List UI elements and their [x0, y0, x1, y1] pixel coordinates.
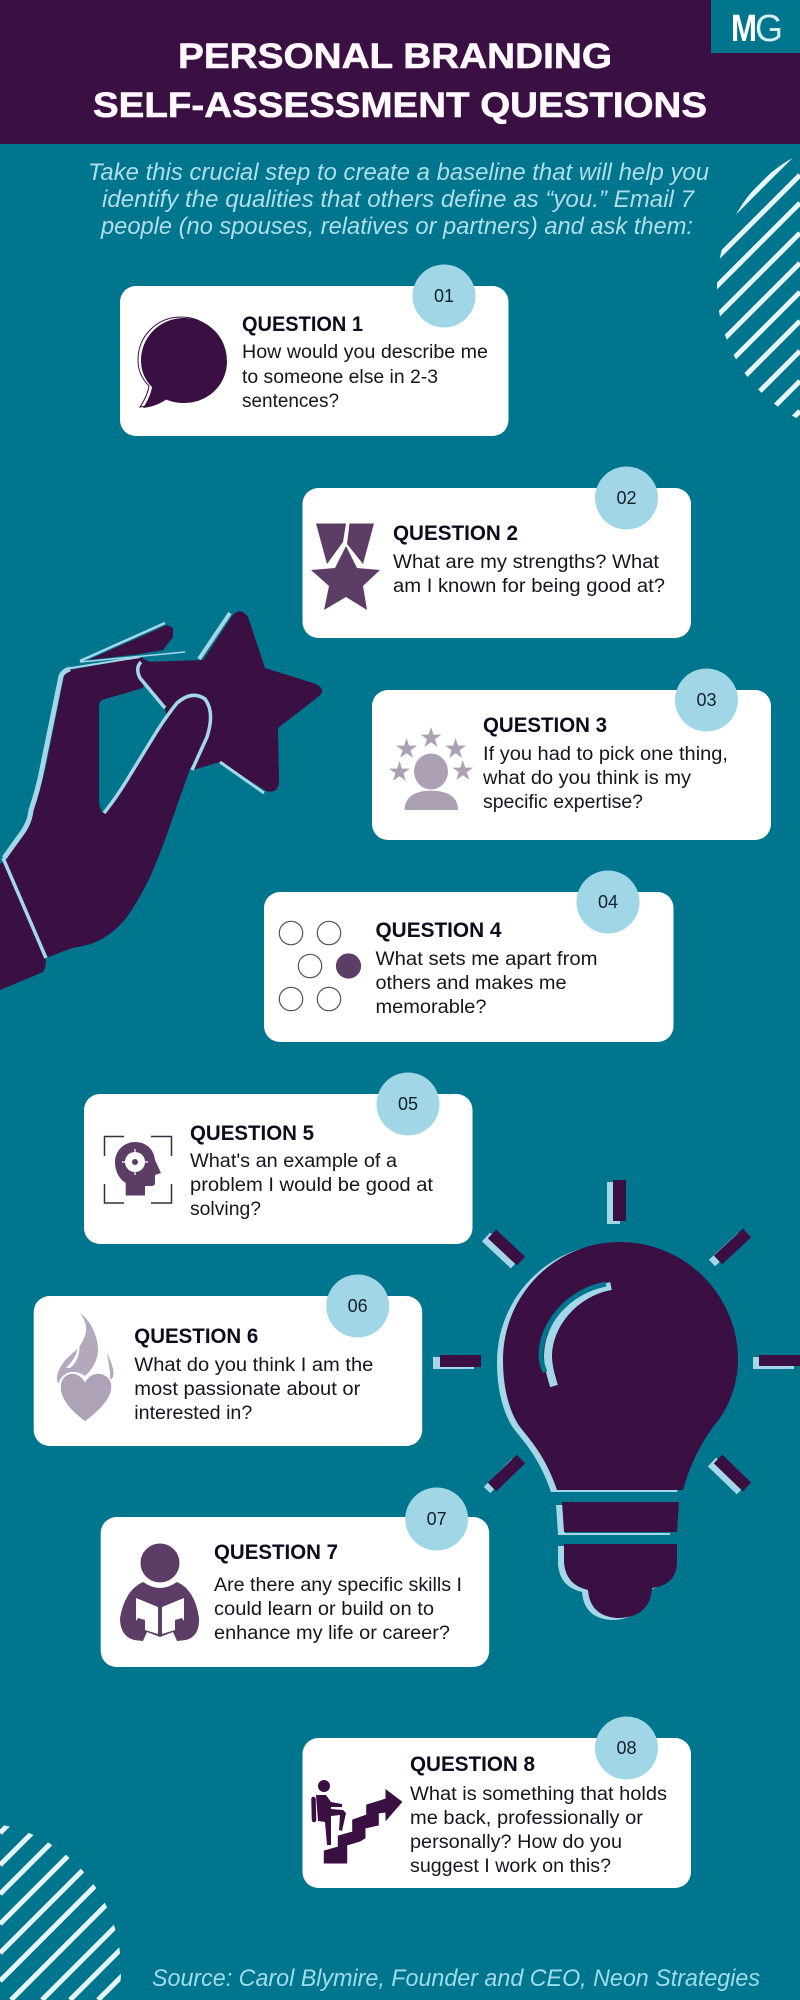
intro text: people (no spouses, relatives or partners) and ask them: — [100, 213, 693, 240]
question 5 text — [190, 1151, 434, 1220]
question 1 heading: QUESTION 1 — [242, 313, 363, 336]
panel: question 1 — [120, 264, 508, 436]
badge 07: 07 — [427, 1509, 447, 1529]
question 2 heading: QUESTION 2 — [393, 522, 518, 545]
source line: Source: Carol Blymire, Founder and CEO, Neon Strategies — [152, 1965, 760, 1992]
question 4 text: What sets me apart from — [376, 949, 598, 970]
icon: person reading — [120, 1542, 199, 1641]
badge 04: 04 — [598, 892, 618, 912]
bulb glass — [497, 1242, 738, 1492]
panel: question 7 — [101, 1488, 489, 1667]
question 5 heading: QUESTION 5 — [190, 1122, 314, 1145]
badge 01 — [412, 264, 476, 328]
title: PERSONAL BRANDING — [178, 37, 612, 76]
header band — [0, 0, 800, 144]
question 7 text: enhance my life or career? — [214, 1623, 450, 1644]
panel: question 8 — [302, 1716, 691, 1888]
question 2 text: What are my strengths? What — [393, 552, 660, 573]
rays — [433, 1180, 800, 1490]
badge 03: 03 — [696, 690, 717, 710]
question 7 heading: QUESTION 7 — [214, 1541, 338, 1564]
logo: MG — [711, 0, 800, 53]
panel: question 4 — [264, 870, 674, 1042]
question 3 text — [482, 744, 728, 813]
question 8 text: suggest I work on this? — [410, 1856, 611, 1877]
illustration: light bulb — [433, 1180, 800, 1620]
thumb — [104, 695, 211, 860]
badge 01: 01 — [434, 286, 454, 306]
badge 07 — [405, 1488, 468, 1550]
icon: head with target — [104, 1136, 172, 1203]
badge 02: 02 — [616, 488, 637, 508]
badge 02 — [595, 466, 658, 530]
question 1 text: to someone else in 2-3 — [242, 367, 438, 388]
badge 04 — [576, 870, 640, 934]
question 6 text: most passionate about or — [134, 1379, 361, 1400]
question 8 text: personally? How do you — [410, 1832, 622, 1853]
intro text: identify the qualities that others define as “you.” Email 7 — [102, 186, 696, 213]
badge 05: 05 — [398, 1094, 418, 1114]
icon: person with stars — [389, 727, 473, 810]
badge 05 — [376, 1072, 440, 1136]
question 4 text — [376, 949, 598, 1018]
bulb base — [556, 1502, 679, 1620]
icon: climbing stairs arrow — [314, 1780, 402, 1863]
question 6 heading: QUESTION 6 — [134, 1325, 258, 1348]
icon: speech bubble — [138, 317, 227, 408]
question 8 text: What is something that holds — [410, 1784, 667, 1805]
panel: question 5 — [84, 1072, 472, 1244]
logo: MG: M — [731, 8, 757, 50]
intro text: Take this crucial step to create a baseline that will help you — [88, 159, 709, 186]
question 3 text: specific expertise? — [483, 792, 643, 813]
question 8 text — [410, 1784, 667, 1877]
icon: medal — [311, 524, 380, 610]
title — [93, 37, 707, 125]
question 4 text: memorable? — [376, 997, 486, 1018]
illustration: hand holding star — [0, 611, 322, 990]
question 6 text: interested in? — [134, 1403, 252, 1424]
question 7 text: could learn or build on to — [214, 1599, 434, 1620]
question 4 heading: QUESTION 4 — [376, 919, 502, 942]
question 6 text: What do you think I am the — [134, 1355, 373, 1376]
question 1 text: How would you describe me — [242, 342, 488, 363]
badge 06: 06 — [348, 1296, 368, 1316]
badge 08: 08 — [616, 1738, 637, 1758]
star — [138, 611, 322, 793]
question 8 text: me back, professionally or — [410, 1808, 644, 1829]
question 3 text: If you had to pick one thing, — [483, 744, 728, 765]
question 3 heading: QUESTION 3 — [483, 714, 607, 737]
icon: standout circles — [279, 921, 360, 1011]
question 5 text: What's an example of a — [190, 1151, 397, 1172]
question 2 text: am I known for being good at? — [393, 576, 665, 597]
question 8 heading: QUESTION 8 — [410, 1753, 535, 1776]
intro text — [88, 159, 709, 240]
badge 03 — [675, 668, 738, 732]
badge 06 — [326, 1274, 389, 1338]
question 1 text — [242, 342, 488, 412]
question 6 text — [134, 1355, 373, 1424]
question 3 text: what do you think is my — [482, 768, 692, 789]
question 2 text — [393, 552, 665, 597]
question 4 text: others and makes me — [376, 973, 566, 994]
panel: question 2 — [302, 466, 691, 638]
logo: MG: G — [755, 8, 783, 50]
question 5 text: problem I would be good at — [190, 1175, 434, 1196]
panel: question 3 — [372, 668, 771, 840]
question 5 text: solving? — [190, 1199, 261, 1220]
badge 08 — [595, 1716, 658, 1780]
question 1 text: sentences? — [242, 391, 339, 412]
title: SELF-ASSESSMENT QUESTIONS — [93, 86, 707, 125]
panel: question 6 — [34, 1274, 422, 1446]
question 7 text — [214, 1575, 462, 1644]
icon: flaming heart — [57, 1313, 114, 1422]
question 7 text: Are there any specific skills I — [214, 1575, 462, 1596]
